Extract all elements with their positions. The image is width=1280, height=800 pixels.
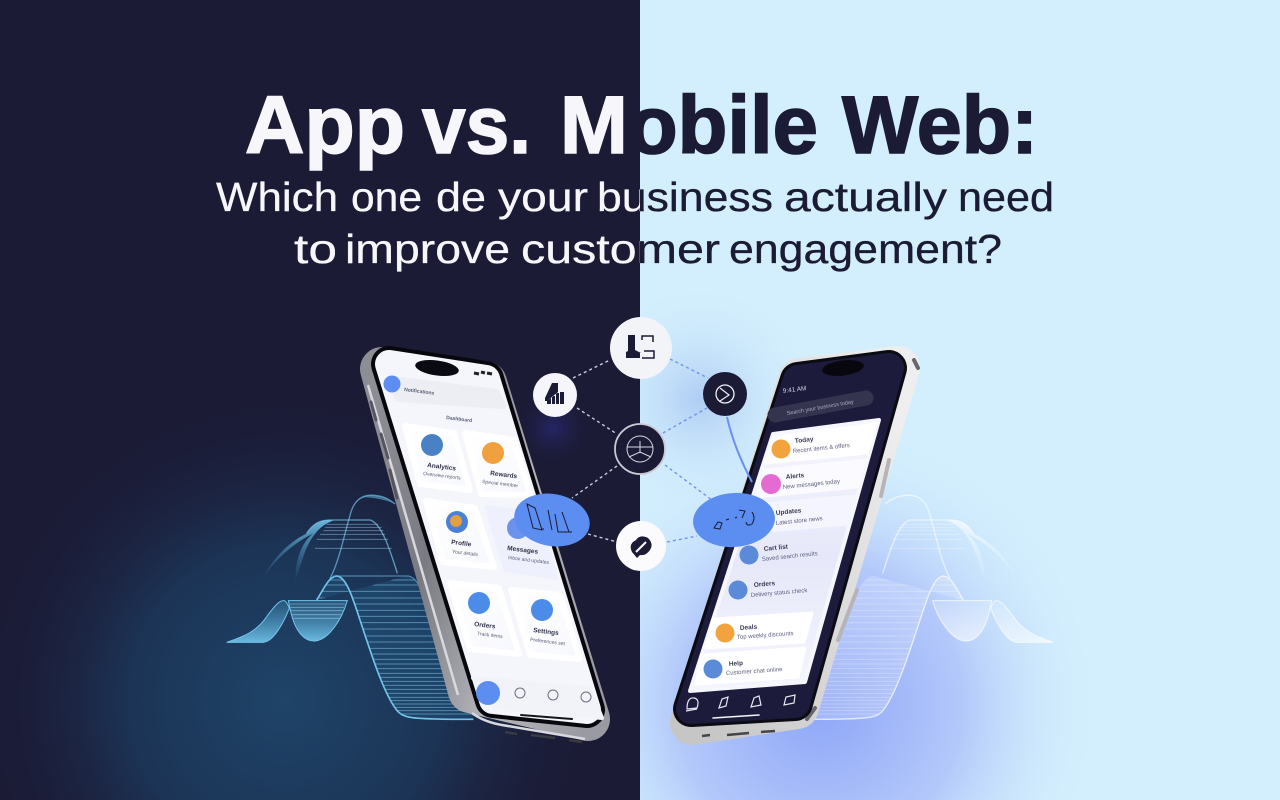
card 4 <box>488 508 555 577</box>
row 6 <box>706 613 812 648</box>
node: right <box>703 372 747 416</box>
node: left <box>533 373 577 417</box>
status text: 9:41 AM <box>782 385 807 395</box>
background glow: right <box>640 360 1280 800</box>
row 1: Recent items & offers <box>793 443 850 455</box>
right phone <box>686 358 918 736</box>
subtitle: to <box>294 226 337 272</box>
frame dark accents <box>807 360 918 719</box>
status bar <box>474 372 492 374</box>
row 4: Saved search results <box>762 551 818 563</box>
subtitle <box>216 174 1054 272</box>
row 6: Top weekly discounts <box>737 631 794 641</box>
row 7: Help <box>729 660 743 668</box>
title <box>245 80 1038 171</box>
search text: Notifications <box>404 387 435 397</box>
dynamic island <box>821 358 865 378</box>
card 3 <box>426 501 494 567</box>
card 2 <box>465 433 530 495</box>
row 4: Cart list <box>763 543 789 553</box>
home indicator <box>713 715 759 718</box>
network connectors <box>572 359 712 542</box>
row 7: Customer chat online <box>726 667 783 677</box>
card 4: Messages <box>507 545 539 556</box>
row 6: Deals <box>740 624 758 632</box>
bottom ports <box>702 731 775 736</box>
card 1: Overview reports <box>423 471 461 482</box>
background: light right half <box>640 0 1280 800</box>
card 5: Track items <box>477 631 503 640</box>
card 1: Analytics <box>427 462 457 473</box>
card 6 <box>511 590 580 659</box>
card 3: Profile <box>451 539 472 548</box>
subtitle: engagement? <box>729 226 1002 272</box>
screen <box>691 368 889 709</box>
black bezel <box>389 364 587 710</box>
ribbon wave: left <box>227 495 480 722</box>
row 3: Updates <box>775 507 802 517</box>
avatar <box>384 376 400 392</box>
row 4 <box>740 543 818 564</box>
blue bubble: left <box>510 488 594 552</box>
row 5: Delivery status check <box>751 588 809 599</box>
row 5: Orders <box>754 580 776 589</box>
title: Mobile <box>560 80 818 171</box>
metal frame <box>692 368 898 723</box>
title: App <box>245 80 405 171</box>
card 3: Your details <box>452 549 479 558</box>
row 3: Latest store news <box>776 516 823 527</box>
section heading: Dashboard <box>446 415 472 424</box>
solid connector <box>727 417 752 482</box>
row 2: Alerts <box>785 472 805 481</box>
nav active button <box>476 681 500 705</box>
left phone <box>368 358 602 742</box>
row 1: Today <box>794 436 814 445</box>
background: dark left half <box>0 0 640 800</box>
background glow: centre left <box>510 385 600 475</box>
nav icons <box>515 688 591 702</box>
bottom nav bar <box>473 678 602 718</box>
background glow: left <box>0 380 640 800</box>
screen <box>389 364 587 710</box>
row 5 <box>728 580 809 600</box>
search pill <box>775 398 866 415</box>
card 5 <box>450 583 519 654</box>
node: centre <box>615 424 665 474</box>
background glow: top centre right <box>640 280 840 520</box>
nav icons <box>686 695 795 711</box>
side buttons <box>838 460 889 640</box>
node: bottom <box>616 521 666 571</box>
side buttons <box>371 402 397 498</box>
subtitle: Which <box>216 174 338 220</box>
card 6: Settings <box>533 627 559 637</box>
metal frame <box>382 369 588 719</box>
subtitle: customer <box>521 226 720 272</box>
list panel <box>690 420 879 691</box>
ribbon wave: right <box>800 495 1053 722</box>
subtitle: de <box>436 174 486 220</box>
row 2: New messages today <box>783 479 840 491</box>
card 4: Inbox and updates <box>508 555 550 566</box>
card 2: Rewards <box>490 470 518 480</box>
row 1 <box>766 424 876 463</box>
card 6: Preferences set <box>530 637 566 647</box>
card 2: Special member <box>482 479 519 489</box>
card 1 <box>405 426 470 490</box>
card 5: Orders <box>474 621 496 631</box>
search text: Search your business today <box>786 399 854 417</box>
subtitle: actually <box>784 174 948 220</box>
title: Web: <box>842 80 1038 171</box>
title: vs. <box>422 80 531 171</box>
dynamic island <box>414 358 460 378</box>
row 3 <box>747 496 854 533</box>
bottom ports <box>505 732 582 742</box>
blue bubble: right <box>691 490 777 550</box>
row 7 <box>696 648 805 684</box>
node: top <box>610 317 672 379</box>
subtitle: one <box>351 174 422 220</box>
subtitle: improve <box>345 226 510 272</box>
frame bright edge <box>368 385 585 739</box>
subtitle: business <box>597 174 773 220</box>
row 2 <box>757 460 865 497</box>
subtitle: need <box>958 174 1054 220</box>
subtitle: your <box>498 174 588 220</box>
home indicator <box>521 715 572 719</box>
black bezel <box>691 368 889 709</box>
search bar <box>393 380 502 405</box>
